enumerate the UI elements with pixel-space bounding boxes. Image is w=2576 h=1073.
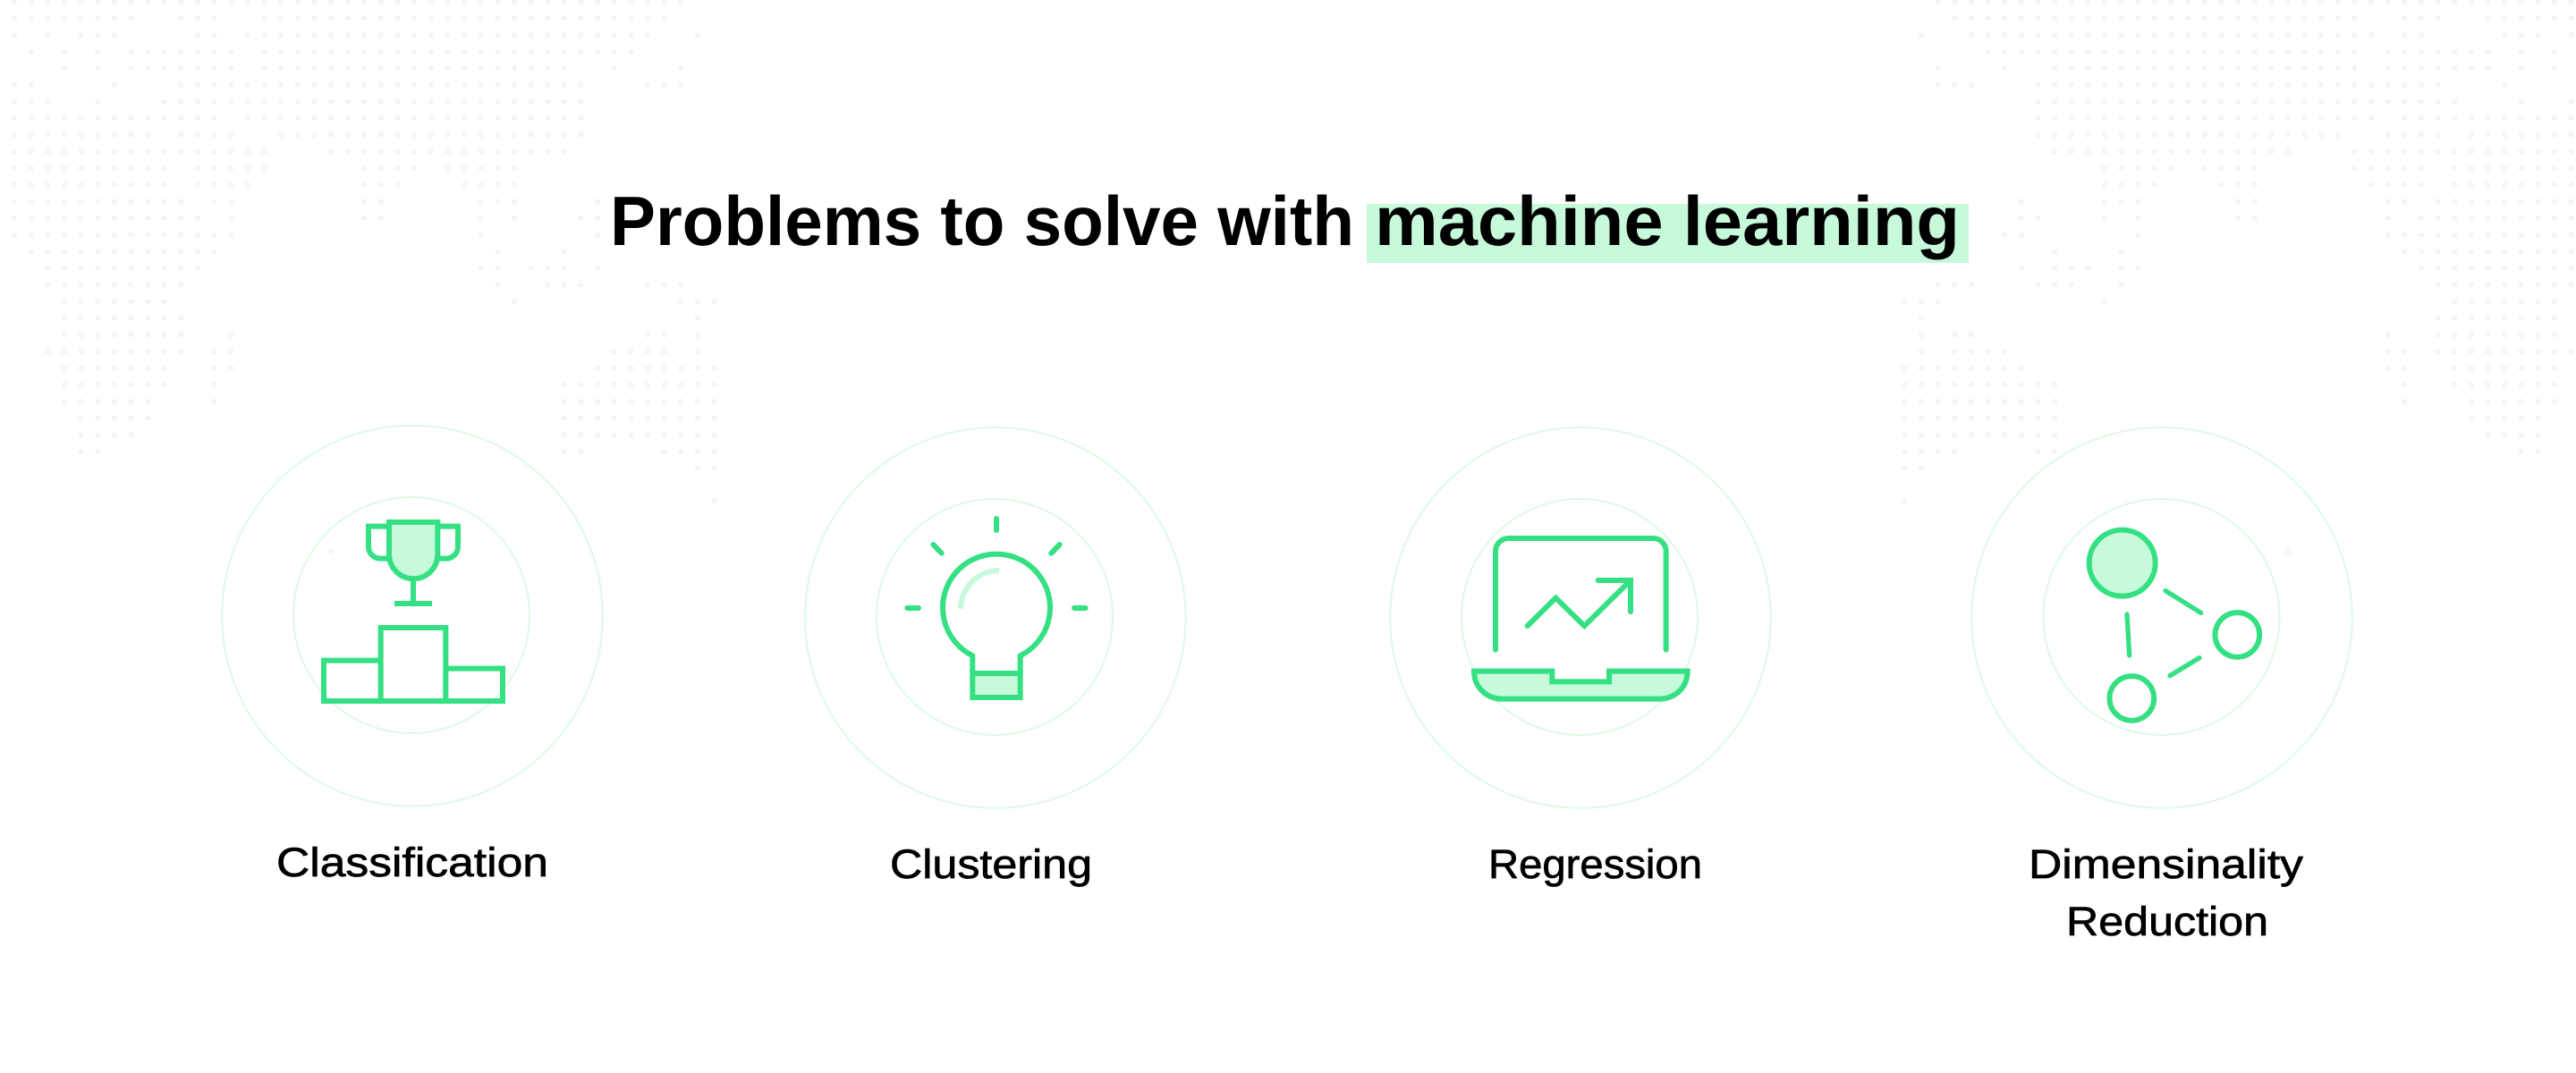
rings: [1390, 427, 1771, 808]
item: clustering: [805, 427, 1186, 887]
heading text: highlighted: machine learning: [1375, 182, 1960, 260]
heading text: lead: Problems to solve with: [610, 182, 1354, 260]
icon: trophy on podium: [324, 522, 503, 701]
label: Dimensinality Reduction: Dimensinality: [2029, 841, 2304, 887]
rings: [805, 427, 1186, 808]
background dotted world map, left: [0, 2, 715, 552]
icon: connected nodes: [2089, 530, 2259, 721]
rings: [222, 426, 603, 807]
icon: light bulb: [907, 519, 1086, 697]
label: Dimensinality Reduction: Reduction: [2066, 899, 2268, 944]
heading: [610, 182, 1969, 263]
item: classification: [222, 426, 603, 885]
label: Dimensinality Reduction: [2029, 841, 2304, 944]
label: Regression: Regression: [1488, 841, 1702, 887]
rings: [1971, 427, 2352, 808]
item: regression: [1390, 427, 1771, 887]
label: Clustering: Clustering: [890, 841, 1092, 887]
background dotted world map, right: [1904, 2, 2572, 552]
item: dimensionality reduction: [1971, 427, 2352, 944]
heading highlight: [1367, 204, 1969, 263]
icon: laptop with rising chart: [1474, 538, 1688, 699]
label: Classification: Classification: [276, 840, 548, 885]
